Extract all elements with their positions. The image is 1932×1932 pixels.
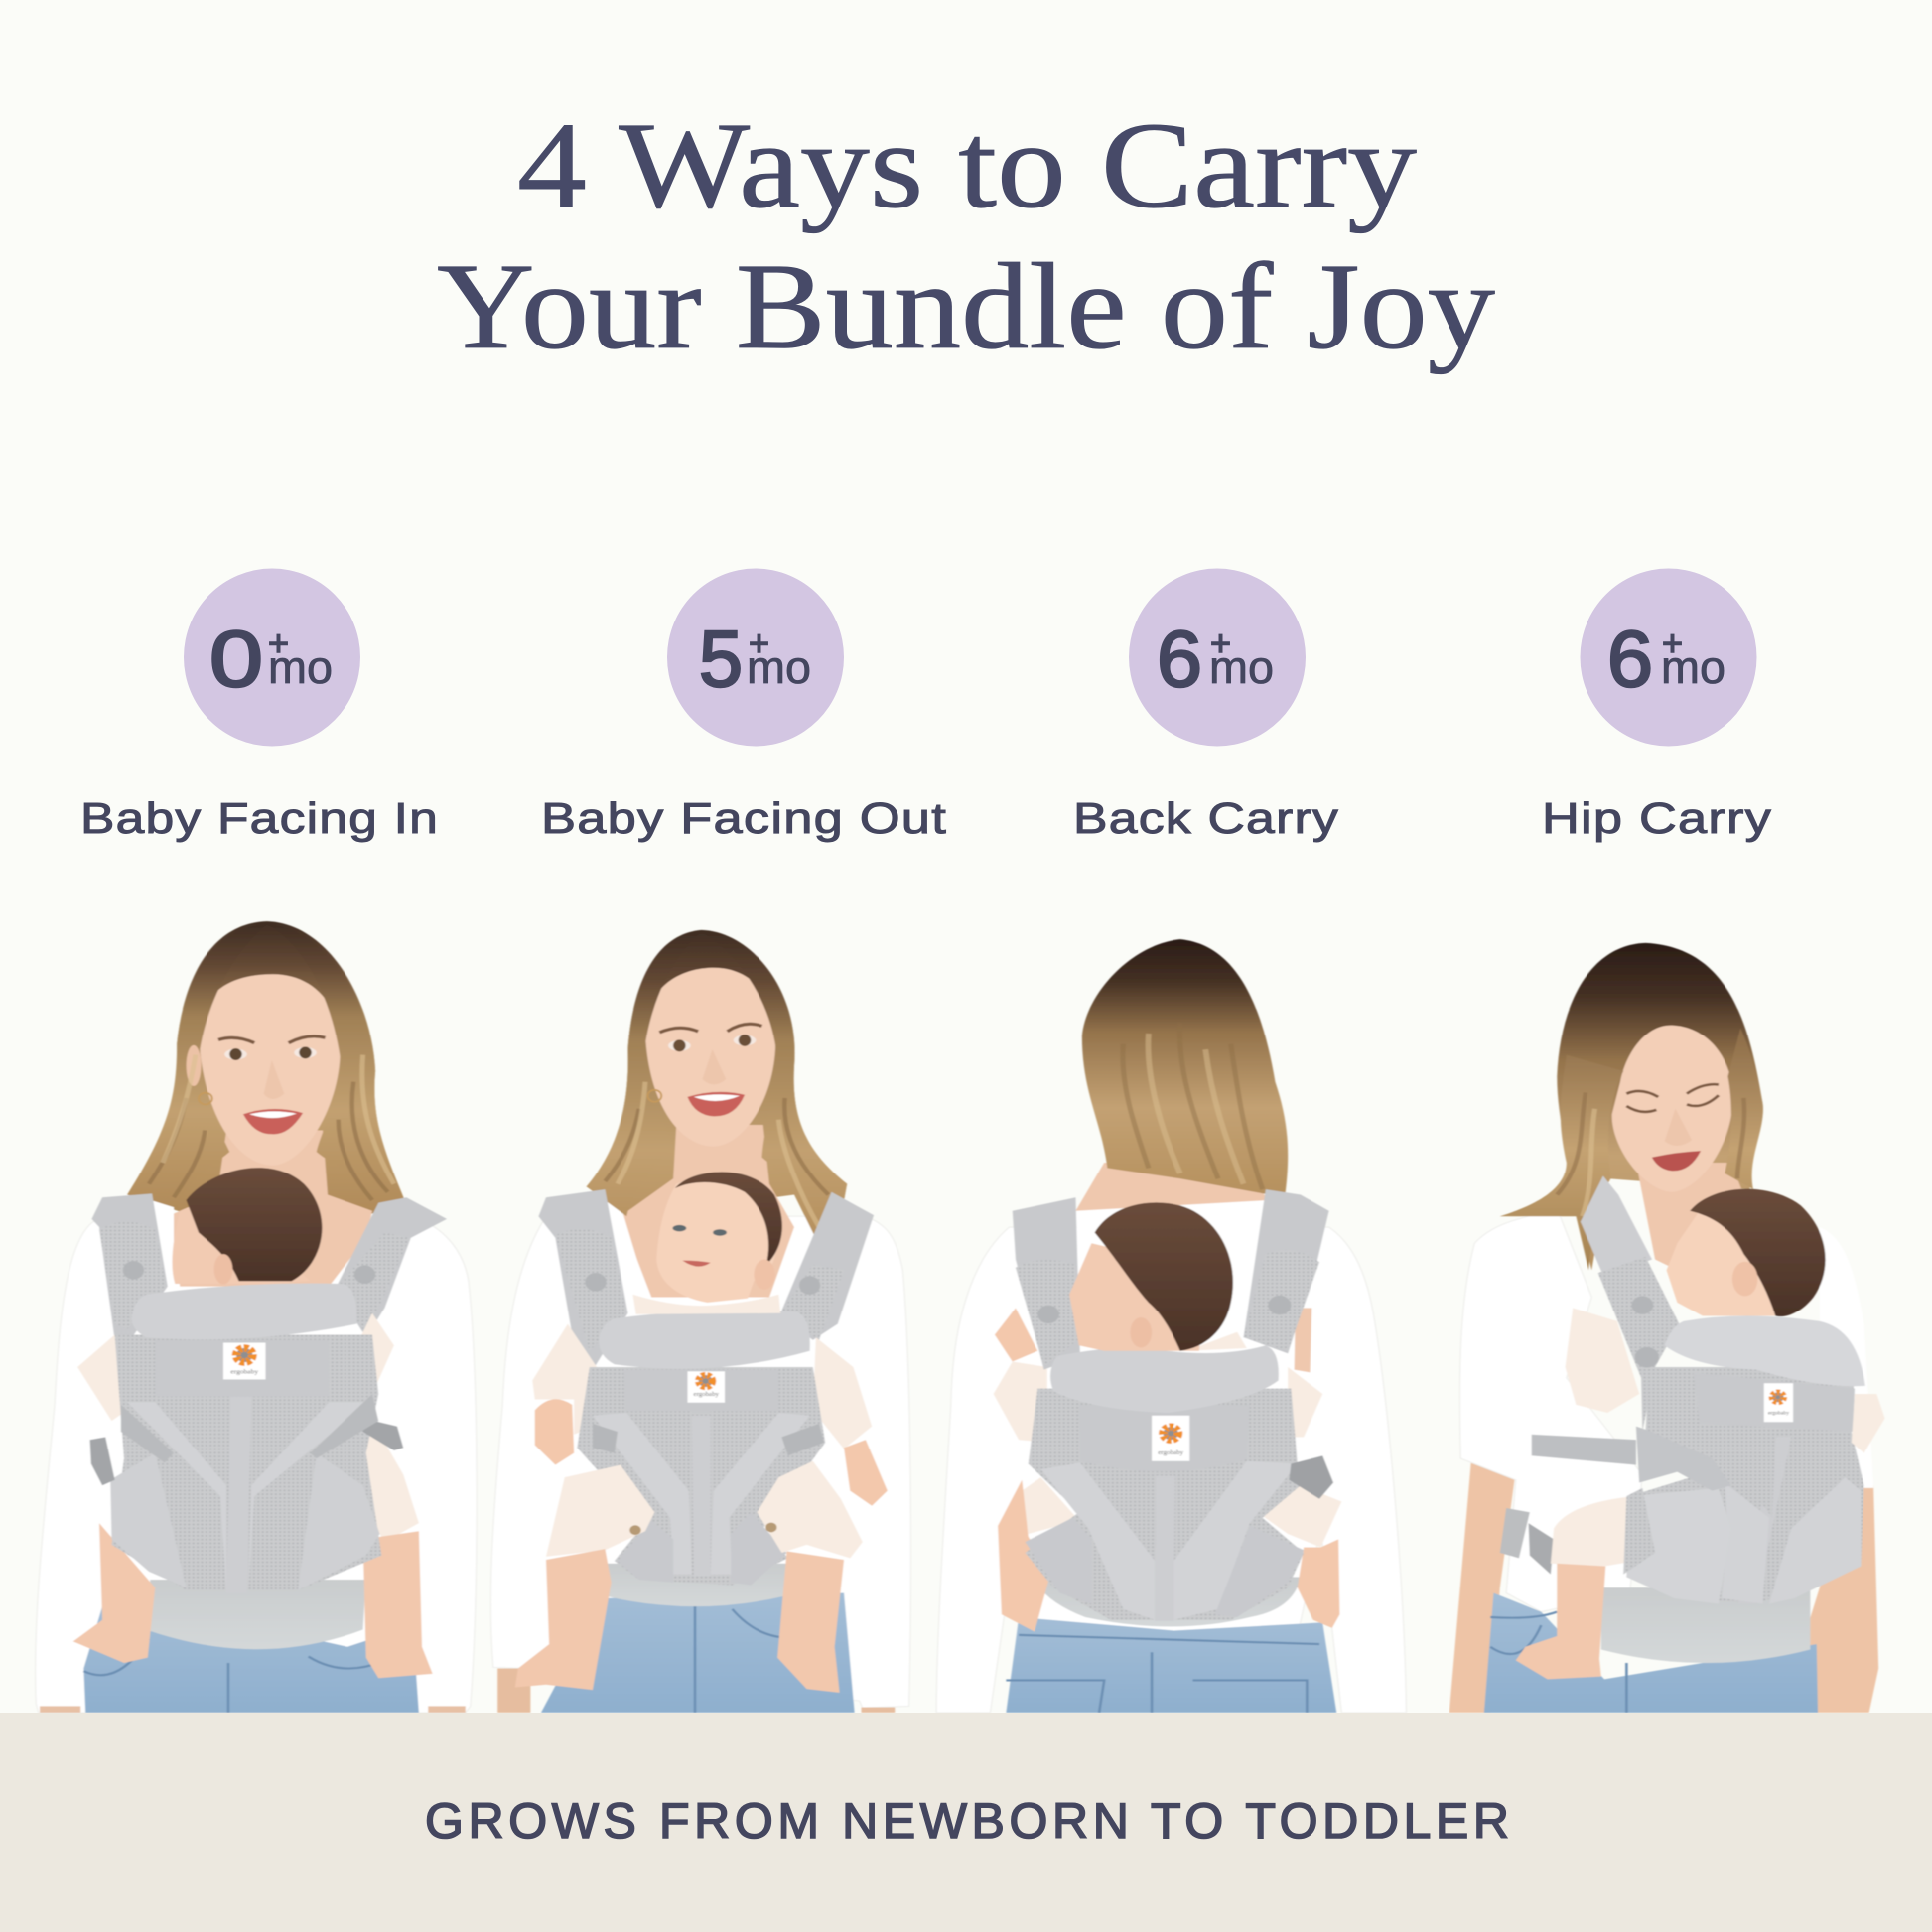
carry labels: [80, 794, 1772, 843]
badge: 6+ months hip carry: [1581, 568, 1757, 747]
hair front locks: [133, 924, 405, 1211]
badge: 0+ months: mo: [268, 641, 333, 693]
back: [1076, 1197, 1266, 1356]
badge: 6+ months hip carry: +: [1662, 622, 1683, 663]
baby shorts and legs: [515, 1461, 863, 1693]
badge: 0+ months: +: [268, 622, 289, 663]
mother hair: [1082, 939, 1288, 1197]
mother hand: [1295, 1308, 1311, 1372]
jeans: [1006, 1617, 1336, 1713]
ergobaby label: [223, 1343, 266, 1379]
carrier body: [577, 1367, 825, 1585]
ergobaby label: ergobaby: [1158, 1449, 1184, 1456]
waist belt: [1037, 1577, 1301, 1626]
carry labels: Baby Facing In: [80, 794, 439, 843]
badge: 6+ months hip carry: mo: [1661, 641, 1725, 693]
baby leg and foot: [1516, 1564, 1605, 1679]
carrier head pad: [599, 1311, 810, 1369]
baby shorts: [1551, 1496, 1636, 1567]
neck: [1636, 1163, 1743, 1281]
face: [1612, 1026, 1733, 1192]
carrier head pad: [131, 1283, 356, 1339]
belt clip: [1529, 1523, 1554, 1575]
baby hands: [535, 1399, 888, 1506]
baby arm: [1566, 1308, 1639, 1413]
carrier body: [1025, 1389, 1333, 1621]
title: 4 Ways to Carry: [517, 97, 1417, 233]
baby collar: [1186, 1332, 1247, 1351]
carrier body: [90, 1334, 403, 1593]
footer band: [0, 1713, 1932, 1932]
carrier straps: [1013, 1189, 1329, 1370]
badge: 6+ months back carry: [1129, 568, 1306, 747]
baby shorts: [345, 1432, 419, 1542]
baby head: [656, 1175, 778, 1303]
ergobaby label: [1764, 1383, 1793, 1422]
baby sleeves and shorts: [994, 1362, 1341, 1548]
mother hair: [587, 930, 847, 1270]
waist belt: [1601, 1587, 1810, 1663]
baby sleeves: [77, 1313, 394, 1421]
baby legs and hand: [998, 1480, 1050, 1632]
badge: 6+ months back carry: +: [1210, 622, 1231, 663]
title: Your Bundle of Joy: [437, 238, 1495, 374]
neck and chest: [168, 1130, 372, 1287]
chest: [621, 1125, 794, 1297]
badge: 5+ months: mo: [747, 641, 811, 693]
photo: baby facing out: [490, 930, 910, 1713]
waist belt: [604, 1564, 786, 1606]
baby sleeves: [532, 1324, 872, 1449]
mother shirt: [1459, 1208, 1642, 1612]
mother sweater: [490, 1216, 910, 1708]
baby sleeve right: [1852, 1394, 1885, 1453]
badge: 6+ months back carry: mo: [1209, 641, 1274, 693]
carrier head pad: [1665, 1315, 1865, 1386]
carry labels: Hip Carry: [1542, 794, 1772, 843]
ergobaby label: [687, 1371, 725, 1403]
waist belt: [149, 1580, 366, 1649]
face: [645, 968, 775, 1147]
face: [199, 974, 341, 1166]
carrier body: [1623, 1367, 1864, 1603]
mother hair: [127, 921, 405, 1213]
photo: baby facing in: [36, 921, 477, 1713]
mother sweater: [36, 1216, 477, 1713]
jeans: [541, 1593, 855, 1713]
clip pouch: [1500, 1508, 1530, 1558]
mother neck: [1076, 1163, 1269, 1211]
footer caption: GROWS FROM NEWBORN TO TODDLER: [425, 1793, 1509, 1849]
badge: 0+ months: 0: [209, 615, 263, 703]
hair front locks: [587, 932, 847, 1268]
baby head: [1667, 1211, 1775, 1315]
baby head: [172, 1195, 310, 1284]
jeans: [1484, 1593, 1818, 1713]
badge: 6+ months hip carry: 6: [1607, 615, 1653, 703]
strap over shoulder: [1581, 1176, 1679, 1432]
baby collar: [633, 1295, 780, 1314]
baby head: [1069, 1243, 1205, 1351]
mother hair: [1500, 943, 1763, 1270]
ergobaby label: [1152, 1416, 1189, 1461]
hair front locks: [1500, 1029, 1763, 1270]
mother arms: [1449, 1458, 1878, 1713]
carrier shoulder straps: [91, 1193, 447, 1340]
carry labels: Baby Facing Out: [541, 794, 947, 843]
carrier straps: [538, 1189, 874, 1375]
chest strap: [1532, 1435, 1636, 1465]
badge: 0+ months: [184, 568, 360, 747]
photo: hip carry: [1449, 943, 1885, 1713]
title: [437, 97, 1495, 374]
mother arm sliver: [497, 1668, 895, 1713]
badge: 5+ months: [667, 568, 844, 747]
ergobaby label: ergobaby: [694, 1392, 720, 1398]
badge: 6+ months back carry: 6: [1157, 615, 1202, 703]
badge: 5+ months: +: [749, 622, 769, 663]
jeans: [83, 1606, 419, 1713]
mother sweater: [936, 1227, 1406, 1713]
ergobaby label: ergobaby: [230, 1368, 259, 1375]
ergobaby label: ergobaby: [1768, 1411, 1789, 1416]
baby legs and feet: [73, 1523, 155, 1663]
badge: 5+ months: 5: [699, 615, 743, 703]
photo: back carry: [936, 939, 1406, 1713]
carry labels: Back Carry: [1073, 794, 1339, 843]
carrier head pad: [1050, 1345, 1279, 1413]
